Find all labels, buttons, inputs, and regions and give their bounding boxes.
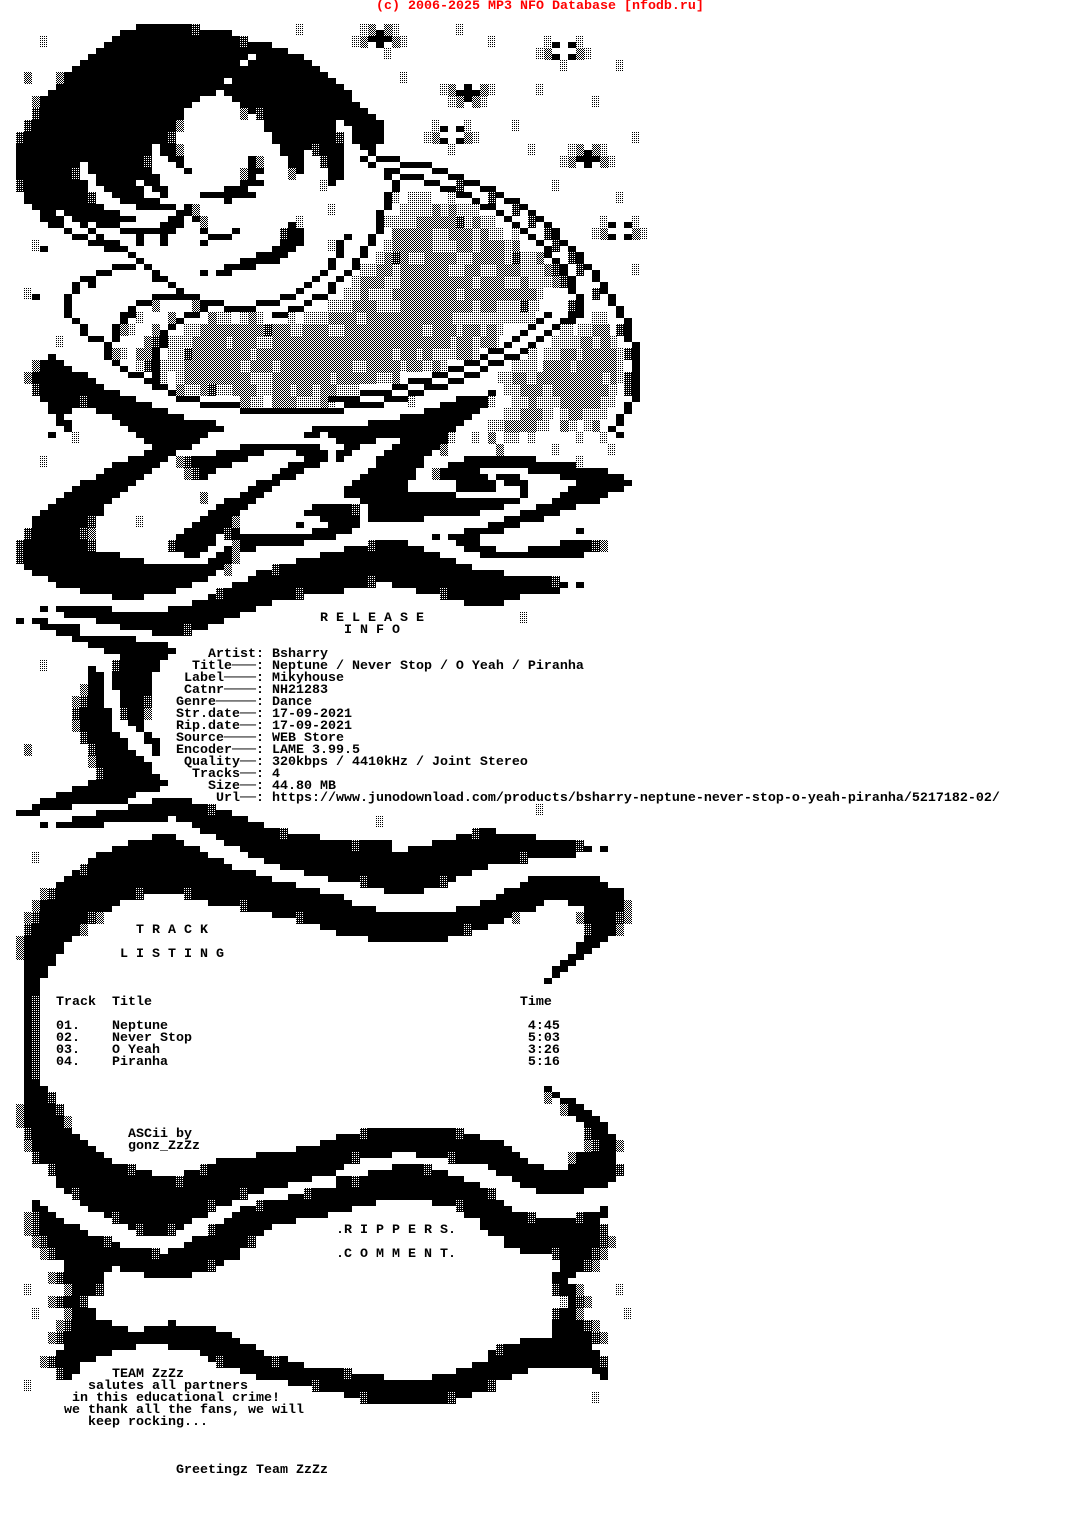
hair, girl and bowl line art bbox=[16, 27, 640, 627]
icon: star 2 bbox=[440, 87, 496, 102]
team message: TEAM ZzZz salutes all partners in this educational crime! we thank all the fans, we will keep rocking... bbox=[64, 1367, 304, 1430]
icon: star 3 bbox=[560, 150, 616, 165]
shaded bowl / moon dither bbox=[112, 198, 623, 462]
release info details: Artist: Bsharry Title───: Neptune / Never Stop / O Yeah / Piranha Label────: Mikyhouse Catnr────: NH21283 Genre─────: Dance Str.date──: 17-09-2021 Rip.date──: 17-09-2021 Source────: WEB Store Encoder───: LAME 3.99.5 Quality──: 320kbps / 4410kHz / Joint Stereo Tracks──: 4 Size──: 44.80 MB Url──: https://www.junodownload.com/products/bsharry-neptune-never-stop-o-yeah-piranha/5217182-02/ bbox=[176, 647, 1000, 806]
rippers comment frame bbox=[24, 1215, 632, 1401]
icon: star 1 bbox=[352, 30, 408, 54]
ascii credit: ASCii by gonz_ZzZz bbox=[128, 1127, 200, 1154]
heading: rippers comment: .R I P P E R S. .C O M M E N T. bbox=[336, 1223, 456, 1262]
vine behind release info bbox=[16, 630, 544, 819]
greeting: Greetingz Team ZzZz bbox=[176, 1463, 328, 1478]
track table: Track Title Time 01. Neptune 4:45 02. Never Stop 5:03 03. O Yeah 3:26 04. Piranha 5:16 bbox=[56, 995, 560, 1070]
icon: box sparkle C bbox=[592, 222, 648, 237]
icon: box sparkle B bbox=[424, 126, 480, 150]
dither specks on the girl and bowl art bbox=[16, 30, 640, 618]
heading: track listing: T R A C K L I S T I N G bbox=[120, 923, 224, 962]
heading: release info: R E L E A S E I N F O bbox=[320, 611, 424, 638]
icon: box sparkle A bbox=[536, 42, 592, 66]
track listing frame bbox=[16, 822, 632, 1209]
